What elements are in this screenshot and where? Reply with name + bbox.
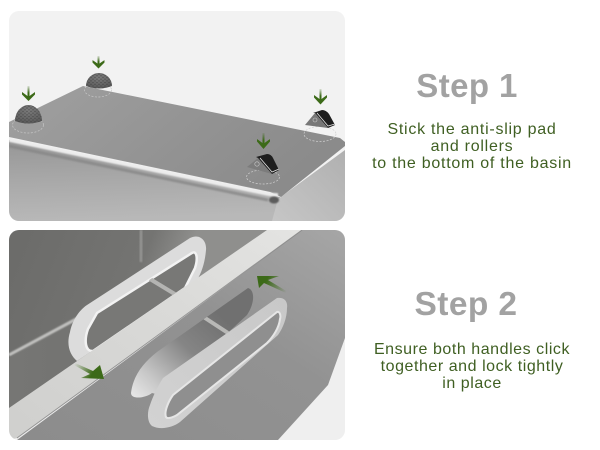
arrow: down to left pad: [22, 86, 35, 101]
basin interior: [9, 230, 267, 358]
basin bottom surface: [9, 86, 345, 197]
dashed footprint: roller back: [304, 126, 336, 142]
handle outer ring: [148, 298, 287, 428]
anti-slip pad left: [15, 105, 42, 124]
roller front: [247, 154, 279, 174]
text: step 1 description: and rollers: [431, 138, 513, 155]
rolled rim highlight: [9, 140, 278, 195]
dashed footprint: pad left: [12, 120, 44, 134]
text: step 2 description: Ensure both handles click: [374, 341, 570, 358]
rim corner: [269, 196, 279, 204]
arrow: down to back pad: [92, 56, 104, 68]
rim band: [9, 230, 302, 440]
arrow: push handle out: [257, 276, 286, 292]
roller back: [305, 110, 335, 128]
text: step 2 description: in place: [442, 375, 502, 392]
heading: step 2: Step 2: [415, 286, 517, 323]
basin outer wall: [17, 230, 345, 440]
heading: step 1: Step 1: [416, 67, 518, 104]
handle inside ring: [68, 236, 206, 361]
interior floor: [9, 300, 190, 410]
arrow: down to back roller: [314, 89, 327, 104]
text: step 1 description: to the bottom of the basin: [372, 155, 572, 172]
text: step 1 description: Stick the anti-slip pad: [387, 121, 557, 138]
anti-slip pad back: [86, 73, 112, 88]
arrow: down to front roller: [257, 133, 270, 149]
panel: step 2 handles: [9, 230, 345, 440]
dashed footprint: roller front: [246, 170, 280, 184]
text: step 2 description: together and lock tightly: [381, 358, 563, 375]
arrow: push handle in: [74, 363, 104, 379]
inside handle opening: [86, 252, 197, 351]
oval cut-out: [131, 288, 253, 398]
illustration panels: [9, 11, 345, 440]
text: step 1 description: [372, 121, 572, 172]
basin side right: [272, 150, 345, 221]
dashed footprint: pad back: [84, 86, 112, 98]
soft shade under rim: [9, 146, 268, 200]
interior corner seam: [140, 230, 142, 262]
panel: step 1 basin bottom: [9, 11, 345, 221]
basin side front: [9, 140, 280, 221]
text: step 2 description: [374, 341, 570, 392]
